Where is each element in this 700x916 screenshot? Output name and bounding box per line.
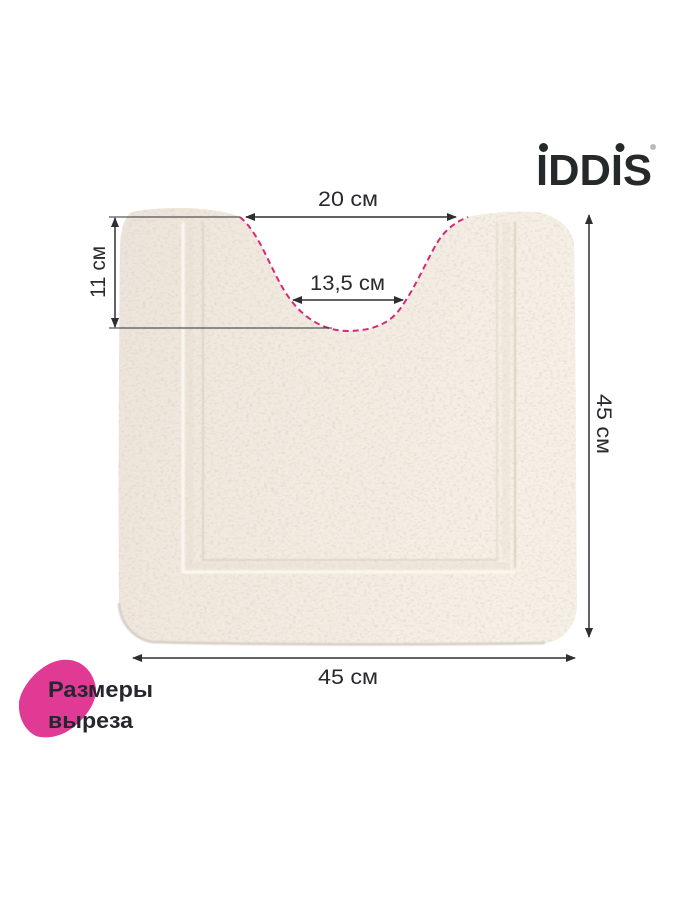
icon: pink blob (19, 660, 96, 737)
dimension: width 45 cm: 45 см (318, 666, 378, 689)
dimension: height 45 cm: 45 см (592, 394, 615, 454)
dimension: cutout width 13,5 cm: 13,5 см (310, 272, 385, 295)
dimension: cutout width 20 cm: 20 см (318, 188, 378, 211)
logo: IDDIS: IDDIS (536, 146, 652, 195)
dimension: cutout width 13,5 cm (293, 272, 403, 300)
cutout dashed outline (240, 217, 468, 331)
caption text: Размеры (48, 677, 153, 702)
dimension: cutout depth 11 cm: 11 см (87, 246, 110, 298)
caption text: выреза (48, 708, 134, 733)
rug inner border bands (183, 222, 515, 572)
rug photo: beige U-shaped bath mat (119, 208, 577, 644)
caption with pink blob (19, 660, 153, 737)
rug edge shading (119, 603, 545, 644)
